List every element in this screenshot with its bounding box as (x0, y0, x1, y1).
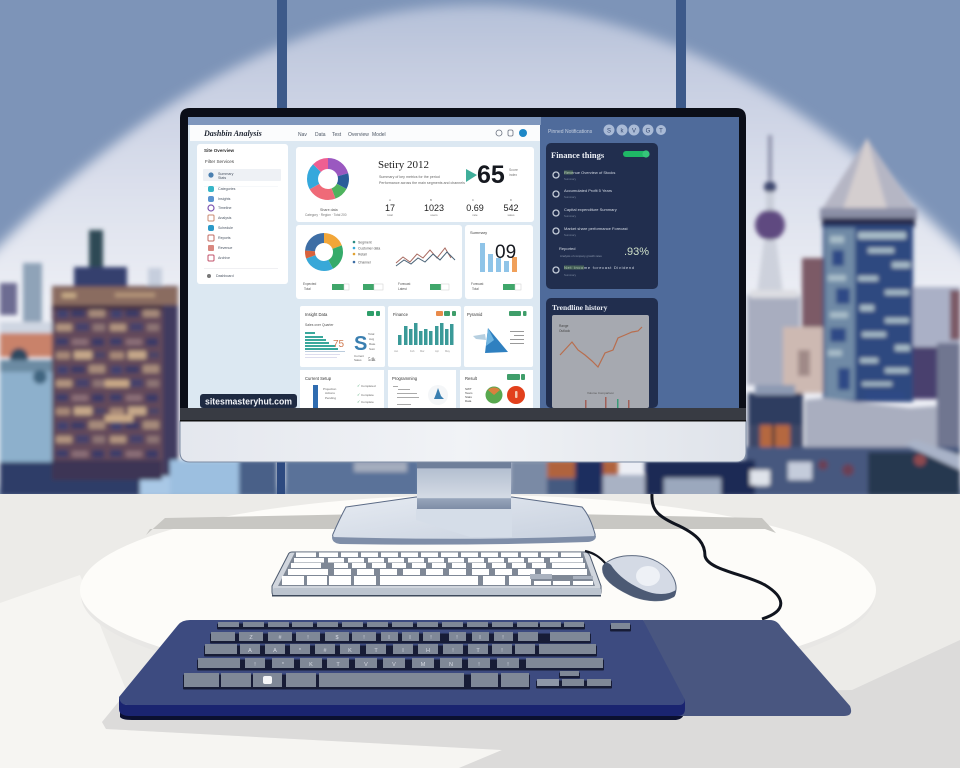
keyboard front (273, 588, 601, 596)
key glyphs: V (392, 662, 396, 668)
top-right notification row: k (620, 128, 624, 134)
background: blurred city skyline (0, 135, 960, 496)
website badge: sitesmasteryhut.com (205, 396, 292, 408)
bar chart card 09: Summary (470, 230, 487, 235)
key glyphs: I (388, 635, 390, 641)
list rows (559, 170, 634, 277)
screen: top band (188, 117, 541, 125)
card: checklist: Pending (325, 396, 336, 400)
pyramid icon (473, 328, 508, 353)
desk: lower right shadow sweep (102, 640, 960, 768)
key glyphs: ! (456, 635, 458, 641)
sidebar labels: Analysis (218, 216, 232, 220)
mouse dark side (603, 563, 676, 601)
list rows: Reported (559, 246, 575, 251)
card footer: Latest (398, 287, 407, 291)
card footer (303, 282, 411, 291)
mini bars (585, 397, 630, 408)
card: horizontal bars: Sum (369, 347, 376, 351)
blue tower (820, 138, 917, 402)
neck reflection (416, 508, 512, 537)
key glyphs: ! (501, 648, 503, 654)
card: horizontal bars: Avg (369, 337, 374, 341)
key glyphs: K (309, 662, 313, 668)
columns (398, 323, 454, 345)
long cable (652, 494, 781, 619)
main KPI card: Category · Region · Total 200 (305, 213, 347, 217)
dark chart card: Trendline history (552, 303, 608, 312)
main KPI card: B (430, 198, 432, 202)
card footer: Expected (303, 282, 317, 286)
donut legend: Segment (358, 240, 372, 244)
list rows: Summary (564, 195, 577, 199)
nav links (298, 132, 386, 138)
mouse cord (585, 551, 606, 564)
sidebar labels: Categories (218, 187, 236, 191)
sidebar labels: Revenue (218, 246, 232, 250)
brick building (52, 230, 178, 480)
desk surface (0, 494, 960, 768)
key glyphs: V (364, 662, 368, 668)
sidebar labels: Stats (218, 176, 226, 180)
row two (211, 632, 590, 641)
sidebar labels: Reports (218, 236, 231, 240)
list rows: Summary (564, 273, 577, 277)
dark notifications card (546, 143, 658, 289)
main KPI card: A (389, 198, 391, 202)
keys (183, 624, 631, 690)
round social icons (604, 124, 666, 136)
key glyphs: ! (452, 648, 454, 654)
sidebar: Site Overview (204, 148, 235, 153)
card: horizontal bars: 54k (368, 358, 376, 363)
big number 65: 65 (477, 161, 505, 189)
big number 09: 09 (495, 242, 516, 263)
list icons (553, 172, 559, 273)
list rows: Revenue Overview of Stocks (564, 170, 615, 175)
list rows: Accumulated Profit 5 Years (564, 188, 612, 193)
key glyphs: ! (507, 662, 509, 668)
card: horizontal bars: Sales (354, 358, 362, 362)
card: horizontal bars: Sales over Quarter (305, 323, 334, 327)
key glyphs: ! (478, 662, 480, 668)
key glyphs: ! (502, 635, 504, 641)
stand neck (417, 462, 511, 509)
key glyphs (248, 635, 509, 668)
sidebar labels: Archive (218, 256, 230, 260)
card: checklist: ✓ (357, 392, 360, 397)
main KPI card (296, 147, 534, 222)
card: checklist: ✓ (357, 399, 360, 404)
list rows: Summary (564, 177, 577, 181)
key glyphs: M (421, 662, 426, 668)
desk: monitor shadow band (146, 512, 776, 535)
desk: white round mat (80, 495, 876, 685)
key glyphs: K (348, 648, 352, 654)
donut legend: Channel (358, 260, 371, 264)
monitor stand (332, 462, 596, 545)
card: checklist: Completed (361, 384, 376, 388)
base front lip (332, 536, 596, 545)
card: column chart (388, 306, 461, 367)
card: checklist: Complete (361, 393, 374, 397)
sidebar labels: Insights (218, 197, 231, 201)
top-right notification row (548, 124, 666, 136)
card footer: Total (304, 287, 311, 291)
row three (205, 644, 596, 654)
key glyphs: T (336, 662, 340, 668)
background: sky (0, 0, 960, 500)
bars (480, 243, 509, 272)
card: pyramid: Pyramid (467, 312, 483, 317)
screen: right blue area (540, 117, 739, 408)
card: checklist: Projection (323, 387, 337, 391)
main KPI card: Summary of key metrics for the period (379, 175, 440, 179)
horizontal bars (305, 332, 338, 350)
value 75: 75 (333, 339, 345, 350)
card: result circles (460, 370, 533, 408)
mouse highlight (636, 566, 660, 586)
main KPI card: index (509, 173, 517, 177)
key glyphs: ! (254, 662, 256, 668)
sidebar labels: Timeline (218, 206, 231, 210)
card: result circles: Result (465, 376, 478, 381)
list rows: Market share performance Forecast (564, 226, 628, 231)
card: marketing (388, 370, 456, 408)
KPI row: 17 (385, 203, 395, 213)
KPI row: 1023 (424, 203, 444, 213)
card: checklist (300, 370, 384, 408)
S glyph: S (354, 333, 367, 355)
key glyphs: $ (335, 635, 339, 641)
bar chart card 09 (465, 225, 533, 299)
desk: round mat rim (81, 499, 875, 691)
header bar (190, 125, 540, 141)
card: column chart: Apr (435, 349, 439, 353)
main KPI card: total (387, 213, 393, 217)
top-right notification row: T (659, 128, 663, 134)
header icons (496, 129, 527, 137)
card: horizontal bars: Insight Data (305, 312, 328, 317)
nav links: Nav (298, 132, 307, 138)
card: result circles: Data (465, 399, 472, 403)
main KPI card: Share data (320, 208, 338, 212)
card: result circles: SWT (465, 387, 472, 391)
dark navy keyboard (119, 620, 851, 720)
dark notifications card: Finance things (551, 150, 605, 160)
list rows: Net income forecast Dividend (564, 265, 634, 270)
key glyphs: # (323, 648, 327, 654)
small extra key (611, 623, 630, 629)
donut and line card (296, 225, 462, 299)
background: lower window frame (277, 460, 285, 495)
dark chart card: Volume Comparison (587, 391, 614, 395)
trend line (560, 327, 642, 367)
card: checklist: Current Setup (305, 376, 332, 381)
sidebar labels (216, 172, 236, 278)
street behind monitor (170, 460, 770, 496)
pad surface (643, 620, 851, 716)
right back buildings (802, 258, 960, 447)
card: column chart: Feb (410, 349, 415, 353)
key glyphs: I (402, 648, 404, 654)
KPI row (385, 203, 519, 213)
row four (198, 658, 603, 668)
line chart (396, 248, 451, 263)
main KPI card: rate (472, 213, 478, 217)
card: column chart: Jan (394, 349, 399, 353)
row five (184, 673, 529, 687)
sidebar: Filter Services (205, 159, 235, 164)
donut legend (353, 240, 380, 264)
desk: lower left lighter area (0, 575, 502, 768)
key glyphs: * (282, 662, 285, 668)
key glyphs: A (248, 648, 252, 654)
main KPI card: C (472, 198, 475, 202)
donut chart large (312, 164, 344, 194)
main KPI card: Performance across the main segments and channels (379, 181, 465, 185)
percentage value: .93% (624, 246, 649, 258)
key glyphs: ! (363, 635, 365, 641)
key glyphs: A (273, 648, 277, 654)
screen (188, 117, 739, 408)
card: horizontal bars: Rate (369, 342, 376, 346)
screen: left light area (188, 117, 541, 408)
sidebar (197, 144, 288, 284)
card: checklist: Complete (361, 400, 374, 404)
key glyphs: ! (307, 635, 309, 641)
card: horizontal bars: Current (354, 354, 364, 358)
key glyphs: H (426, 648, 430, 654)
nav links: Test (332, 132, 342, 138)
key glyphs: I (409, 635, 411, 641)
keyboard top surface (119, 620, 685, 705)
sidebar labels: Dashboard (216, 274, 234, 278)
card: horizontal bars (300, 306, 385, 367)
nav links: Model (372, 132, 386, 138)
top-right notification row: S (607, 128, 611, 134)
sidebar labels: Summary (218, 172, 234, 176)
main KPI card: users (430, 213, 438, 217)
card: column chart: Finance (393, 312, 409, 317)
podium, small house and street (745, 385, 960, 496)
KPI row: 0.69 (466, 203, 484, 213)
key glyphs: Z (249, 635, 253, 641)
bar chart card 09: Total (472, 287, 479, 291)
bar chart card 09: Forecast (471, 282, 484, 286)
key glyphs: * (299, 648, 302, 654)
dark chart card (546, 298, 658, 408)
top-right notification row: Pinned Notifications (548, 129, 593, 135)
monitor (180, 108, 746, 462)
chin top bar (180, 408, 746, 421)
gray chart (552, 315, 649, 408)
white keys (282, 552, 587, 585)
dark chart card: Range (559, 324, 569, 328)
row one (218, 622, 584, 627)
sidebar labels: Schedule (218, 226, 233, 230)
card: checklist: Actions (325, 391, 335, 395)
keyboard shadow (120, 705, 684, 720)
TV tower (747, 135, 823, 393)
monitor chin (180, 421, 746, 462)
arrow keys (530, 574, 593, 585)
card: result circles: Stats (465, 395, 472, 399)
list rows: Summary (564, 214, 577, 218)
donut legend: Retail (358, 252, 367, 256)
main KPI card: D (510, 198, 513, 202)
card footer: Forecast (398, 282, 411, 286)
keyboard front edge (119, 697, 685, 716)
left distant buildings (0, 263, 200, 496)
nav links: Overview (348, 132, 369, 138)
green toggle (623, 150, 650, 158)
KPI title: Setiry 2012 (378, 159, 429, 171)
key glyphs: T (476, 648, 480, 654)
donut chart small (310, 238, 338, 266)
list rows: Capital expenditure Summary (564, 207, 617, 212)
play triangle (466, 169, 477, 182)
key glyphs: N (449, 662, 453, 668)
card: column chart: May (445, 349, 451, 353)
donut legend: Customer data (358, 246, 380, 250)
monitor bezel (180, 108, 746, 425)
background: window frames (277, 0, 686, 110)
key glyphs: I (479, 635, 481, 641)
KPI row: 542 (503, 203, 519, 213)
white keyboard (272, 552, 601, 596)
main KPI card: Score (509, 168, 518, 172)
key glyphs: T (374, 648, 378, 654)
card: column chart: Mar (420, 349, 425, 353)
card: horizontal bars: Total (368, 332, 375, 336)
key glyphs: ! (430, 635, 432, 641)
top-right notification row: V (632, 128, 636, 134)
sidebar icons (207, 172, 214, 278)
logo text: Dashbin Analysis (203, 129, 262, 138)
mouse body (603, 556, 676, 601)
key glyphs: # (278, 635, 282, 641)
list rows: Summary (564, 233, 577, 237)
circular icon (428, 385, 448, 405)
list rows: Analysis of company growth rates (560, 254, 602, 258)
keyboard body (272, 552, 601, 596)
keys well (278, 552, 595, 586)
white logo key mark (263, 676, 272, 684)
main KPI card: sales (507, 213, 515, 217)
background: arch window (0, 5, 960, 490)
dark chart card: Outlook (559, 329, 570, 333)
card: result circles: Team (465, 391, 473, 395)
card: pyramid (464, 306, 533, 367)
mouse (585, 551, 676, 601)
top-right notification row: G (646, 128, 651, 134)
nav links: Data (315, 132, 326, 138)
card: marketing: Programming (392, 376, 418, 381)
card: checklist: ✓ (357, 383, 360, 388)
arrow keys (537, 671, 611, 686)
stand base (333, 497, 595, 541)
